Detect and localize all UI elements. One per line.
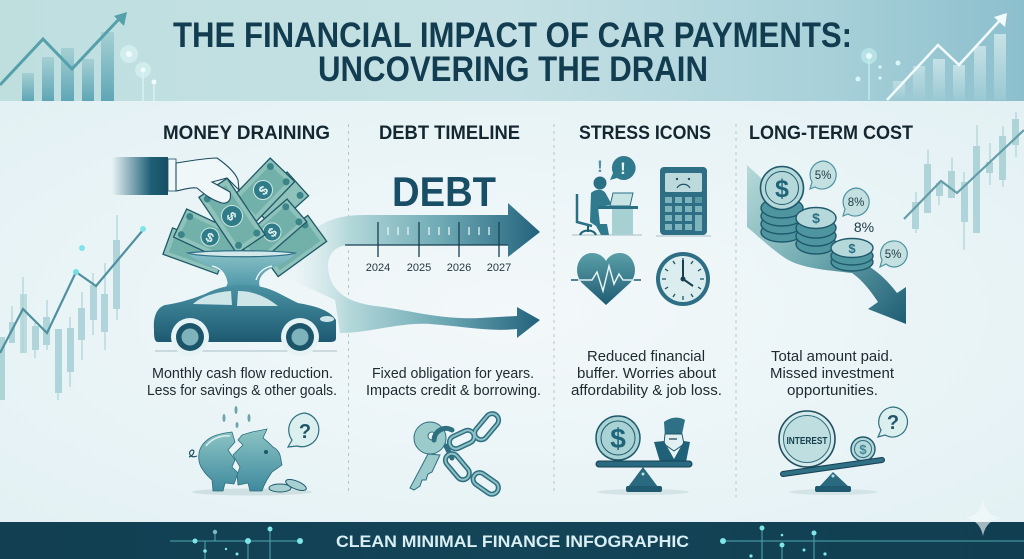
chart: header left rising bars	[0, 12, 156, 101]
text: stress icons: buffer. Worries about	[577, 366, 716, 382]
money bills: $	[255, 182, 272, 198]
text: stress icons: Reduced financial	[587, 349, 705, 365]
heading: long-term cost: LONG-TERM COST	[749, 122, 913, 144]
icon: seesaw with interest coin: INTEREST	[786, 436, 828, 447]
rate bubbles: 5%	[815, 170, 831, 182]
timeline years: 2026	[447, 262, 471, 274]
icon: stressed person at desk	[572, 156, 642, 235]
main background panel	[0, 101, 1024, 522]
debt timeline	[345, 168, 511, 274]
coin stacks	[760, 166, 873, 271]
chart: left candlesticks	[0, 215, 146, 400]
chart: header right rising bars	[856, 13, 1007, 100]
money bills	[163, 158, 327, 277]
icon: stressed person at desk: !	[597, 157, 603, 176]
rate bubbles: 8%	[854, 219, 874, 235]
icon: seesaw with interest coin: $	[859, 442, 867, 457]
text: money draining: Less for savings & other goals.	[147, 383, 337, 399]
icon: sad calculator	[656, 167, 711, 236]
icon: wall clock	[656, 252, 710, 306]
illustration: coins on falling arrow	[747, 161, 907, 324]
title: THE FINANCIAL IMPACT OF CAR PAYMENTS:	[173, 16, 852, 55]
text: long-term cost: Missed investment	[770, 366, 894, 382]
text: debt timeline: Fixed obligation for years.	[372, 366, 534, 382]
footer text: CLEAN MINIMAL FINANCE INFOGRAPHIC	[336, 532, 689, 551]
text: stress icons: affordability & job loss.	[571, 383, 722, 399]
heading: debt timeline: DEBT TIMELINE	[379, 122, 520, 144]
chart: right candlesticks	[904, 112, 1024, 250]
arrows: debt flow and shrinking money flow	[270, 203, 540, 338]
icon: sparkle	[965, 500, 1001, 536]
icon: balance with coin and person	[596, 416, 692, 495]
funnel	[188, 251, 295, 287]
text: money draining: Monthly cash flow reduction.	[152, 366, 333, 382]
circuit decoration right	[720, 526, 1024, 559]
icon: stressed person at desk: !	[620, 159, 626, 178]
timeline years: 2024	[366, 262, 390, 274]
icon: heart with pulse	[571, 253, 641, 305]
title: UNCOVERING THE DRAIN	[318, 50, 708, 89]
question bubble: ?	[299, 421, 311, 443]
coin stacks: $	[812, 210, 820, 226]
text: long-term cost: opportunities.	[787, 383, 878, 399]
falling arrow	[747, 165, 906, 324]
rate bubbles	[810, 161, 907, 267]
rate bubbles: 5%	[885, 249, 901, 261]
heading: money draining: MONEY DRAINING	[163, 122, 330, 144]
coin stacks: $	[775, 175, 789, 203]
timeline ticks	[345, 222, 508, 257]
icon: balance with coin and person: $	[610, 423, 626, 454]
title	[173, 16, 852, 89]
text: long-term cost: Total amount paid.	[771, 349, 893, 365]
circuit decoration left	[170, 526, 303, 559]
coin stacks: $	[848, 241, 856, 256]
icon: seesaw with interest coin	[779, 407, 907, 495]
footer band	[0, 522, 1024, 559]
rate bubbles: 8%	[848, 197, 864, 209]
header band	[0, 0, 1024, 101]
question bubble: ?	[887, 412, 899, 434]
heading: stress icons: STRESS ICONS	[579, 122, 711, 144]
money bills: $	[203, 229, 217, 246]
money bills: $	[223, 209, 240, 224]
car	[154, 285, 337, 356]
hand and sleeve	[112, 157, 239, 203]
illustration: money into funnel over car	[112, 157, 337, 356]
icon: key and chain	[410, 411, 501, 497]
icon: broken piggy bank	[189, 406, 319, 496]
column dividers	[348, 124, 736, 497]
timeline years: 2025	[407, 262, 431, 274]
label: debt: DEBT	[392, 168, 496, 215]
text: debt timeline: Impacts credit & borrowing.	[366, 383, 541, 399]
timeline years: 2027	[487, 262, 511, 274]
timeline years	[366, 262, 511, 274]
money bills: $	[265, 224, 281, 240]
